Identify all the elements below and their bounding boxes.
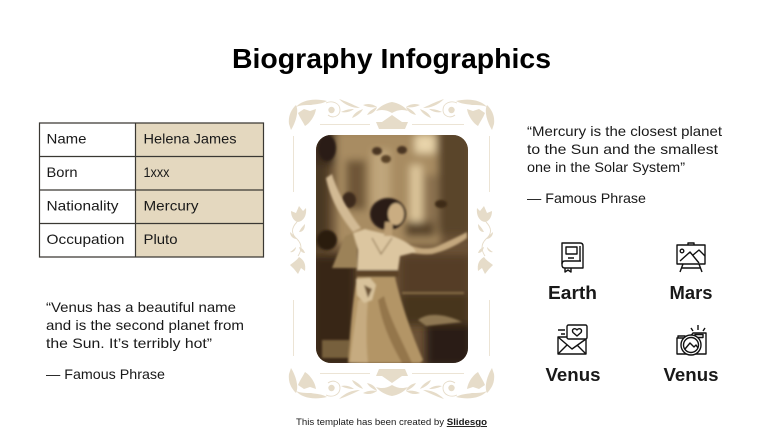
icon: camera	[677, 325, 706, 355]
quote: Venus	[46, 299, 244, 382]
table row: occupation: Pluto	[144, 231, 178, 247]
biography table	[40, 123, 264, 257]
quote: Venus: and is the second planet from	[46, 317, 244, 333]
quote: Mercury	[527, 123, 722, 206]
sepia portrait photo	[312, 130, 472, 367]
right side ornament	[477, 206, 493, 274]
quote: Mercury: one in the Solar System”	[527, 159, 685, 175]
label: Venus right: Venus	[664, 364, 718, 385]
quote: Mercury: “Mercury is the closest planet	[527, 123, 722, 139]
table row: nationality: Nationality	[46, 198, 118, 214]
top ornament	[289, 99, 494, 130]
quote: Venus: “Venus has a beautiful name	[46, 299, 236, 315]
icon: book	[562, 243, 583, 272]
table row: occupation	[46, 231, 178, 247]
table row: name: Name	[46, 130, 87, 146]
label: Earth: Earth	[548, 282, 597, 303]
decorative floral frame	[289, 99, 494, 399]
label: Mars: Mars	[670, 282, 712, 303]
title: Biography Infographics	[232, 43, 551, 74]
photo details: hanging baskets, leaves and shelf	[317, 135, 464, 358]
table row: born: 1xxx	[144, 164, 170, 180]
icon: easel painting	[677, 243, 705, 272]
quote: Mercury: — Famous Phrase	[527, 190, 646, 206]
table row: born: Born	[46, 164, 78, 180]
quote: Venus: — Famous Phrase	[46, 366, 165, 382]
quote: Venus: the Sun. It’s terribly hot”	[46, 335, 212, 351]
table row: name	[46, 130, 236, 146]
photo background: buildings, light and foliage	[312, 130, 472, 367]
photo figure: dancing woman	[326, 174, 467, 363]
bottom ornament	[289, 368, 494, 399]
table row: born	[46, 164, 170, 180]
left side ornament	[290, 206, 306, 274]
table row: nationality: Mercury	[144, 198, 198, 214]
table row: name: Helena James	[144, 130, 236, 146]
footer credit: This template has been created by Slidesgo	[296, 417, 487, 428]
infographic canvas	[38, 48, 722, 427]
icon: love letter	[558, 325, 587, 354]
label: Venus left: Venus	[546, 364, 600, 385]
table row: nationality	[46, 198, 198, 214]
quote: Mercury: to the Sun and the smallest	[527, 141, 718, 157]
table row: occupation: Occupation	[46, 231, 124, 247]
